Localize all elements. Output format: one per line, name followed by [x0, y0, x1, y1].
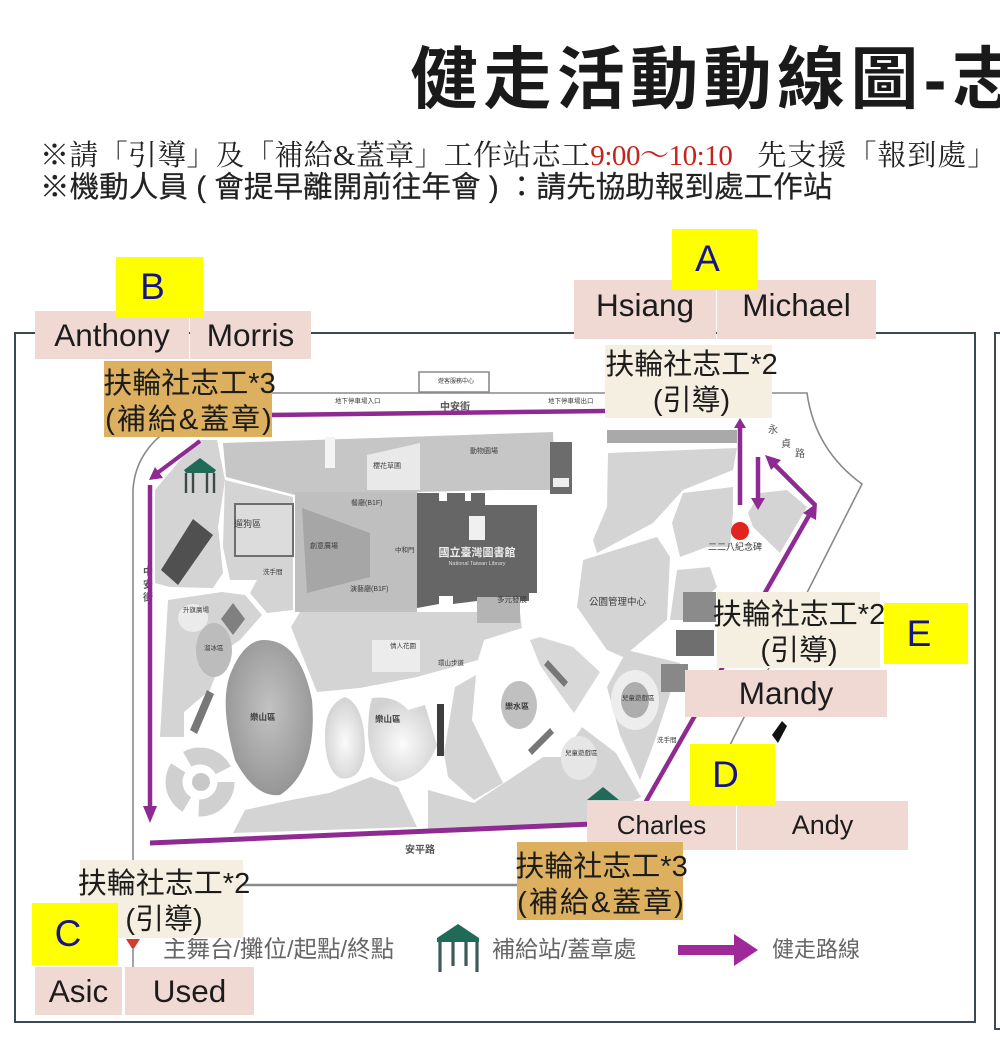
legend text: stage: 主舞台/攤位/起點/終點 — [163, 936, 394, 962]
group D: supply volunteers: (補給&蓋章) — [517, 887, 686, 919]
icon: stage pin — [126, 939, 140, 968]
group D: name Charles: Charles — [617, 810, 706, 840]
map place names — [143, 377, 805, 856]
group B: badge — [116, 257, 203, 317]
map place names: 情人花園 — [390, 641, 416, 650]
group B: name Morris — [190, 311, 311, 359]
map place names: 環山步道 — [438, 658, 464, 667]
group B: supply volunteers: (補給&蓋章) — [105, 404, 274, 436]
group A: name Michael — [717, 280, 876, 339]
group C: name Used: Used — [153, 972, 226, 1008]
legend — [126, 924, 860, 972]
group E: badge — [884, 603, 968, 664]
icon: start and finish point — [731, 522, 749, 540]
group D: supply volunteers — [517, 842, 683, 920]
group D: badge: D — [712, 754, 739, 794]
group C: name Asic: Asic — [49, 972, 108, 1008]
map place names: 中和門 — [395, 545, 414, 554]
map place names: 遛狗區 — [234, 518, 261, 529]
map place names: 洗手間 — [657, 735, 676, 744]
map place names: 兒童遊戲區 — [622, 693, 655, 702]
group B: supply volunteers: 扶輪社志工*3 — [103, 368, 276, 400]
map place names: 路 — [795, 447, 805, 460]
group A: name Hsiang: Hsiang — [596, 287, 694, 323]
group A: guides: 扶輪社志工*2 — [605, 348, 778, 380]
group E: badge: E — [907, 612, 931, 654]
group A: guides: (引導) — [653, 384, 730, 416]
group D: supply volunteers: 扶輪社志工*3 — [515, 851, 688, 883]
mounds and plazas — [161, 519, 659, 795]
group E: name Mandy: Mandy — [739, 675, 833, 711]
group E: guides — [717, 592, 880, 668]
group A: badge — [672, 229, 757, 289]
map place names: 創意廣場 — [310, 541, 338, 550]
map place names: 升旗廣場 — [183, 605, 210, 614]
map place names: 安平路 — [405, 843, 435, 856]
map place names: 貞 — [781, 438, 791, 450]
group D: badge — [690, 744, 775, 805]
map place names: 二二八紀念碑 — [708, 541, 762, 552]
map place names: 遊客服務中心 — [438, 377, 474, 385]
icon: route arrow — [678, 934, 758, 966]
notice line 2: ※機動人員 ( 會提早離開前往年會 ) ：請先協助報到處工作站 — [40, 171, 832, 204]
group A: guides — [605, 345, 772, 418]
map place names: 中 — [143, 565, 153, 578]
group B: badge: B — [140, 266, 165, 307]
group E: guides: 扶輪社志工*2 — [713, 599, 885, 631]
group C: name Asic — [35, 967, 122, 1015]
map place names: 公園管理中心 — [589, 596, 647, 608]
group B: name Anthony: Anthony — [54, 316, 170, 352]
group C: guides: 扶輪社志工*2 — [78, 868, 250, 900]
map place names: 演藝廳(B1F) — [350, 584, 388, 593]
group C: badge: C — [55, 913, 81, 954]
group B: name Anthony — [35, 311, 189, 359]
facility blocks — [190, 592, 787, 755]
map place names: 兒童遊戲區 — [565, 748, 598, 757]
group A: badge: A — [695, 238, 720, 279]
group D: name Charles — [587, 801, 736, 850]
icon: supply tent north-west — [184, 458, 216, 493]
group B: supply volunteers — [104, 361, 272, 437]
group C: guides — [80, 860, 243, 938]
map place names: 地下停車場出口 — [548, 396, 594, 405]
group A: name Michael: Michael — [742, 287, 851, 323]
group D: name Andy — [737, 801, 908, 850]
national library building — [235, 442, 572, 623]
map place names: 洗手間 — [263, 567, 282, 576]
map place names: 櫻花草圃 — [373, 461, 401, 470]
ring plaza — [174, 756, 226, 808]
group A: name Hsiang — [574, 280, 716, 339]
map outline — [133, 372, 862, 885]
national library building: 國立臺灣圖書館 — [438, 545, 516, 559]
map place names: 安 — [143, 578, 153, 591]
park areas — [155, 430, 807, 833]
map place names: 動物園場 — [470, 446, 498, 455]
map place names: 樂水區 — [505, 701, 529, 711]
icon: supply tent south-east — [587, 787, 619, 800]
group D: name Andy: Andy — [792, 810, 853, 840]
notice line 1: ※請「引導」及「補給&蓋章」工作站志工9:00～10:10 先支援「報到處」 — [40, 140, 997, 172]
national library building: National Taiwan Library — [448, 561, 506, 567]
map place names: 中安街 — [440, 400, 470, 413]
map place names: 永 — [768, 423, 778, 436]
group E: guides: (引導) — [760, 635, 838, 667]
map place names: 多元發展 — [497, 594, 527, 604]
map place names: 地下停車場入口 — [335, 396, 380, 405]
icon: supply tent — [437, 924, 479, 972]
map place names: 餐廳(B1F) — [351, 498, 382, 507]
group C: badge — [32, 903, 118, 965]
group C: guides: (引導) — [125, 904, 203, 936]
panel: right neighbour frame — [994, 332, 1000, 1030]
map place names: 溜冰區 — [204, 643, 224, 652]
group C: name Used — [125, 967, 254, 1015]
legend text: supply: 補給站/蓋章處 — [492, 936, 636, 962]
group B: name Morris: Morris — [207, 316, 294, 352]
map place names: 樂山區 — [375, 714, 401, 724]
map place names: 樂山區 — [250, 712, 276, 722]
legend text: route: 健走路線 — [772, 937, 860, 962]
walking route — [143, 411, 817, 843]
panel: map frame — [14, 332, 976, 1023]
map place names: 街 — [143, 591, 153, 604]
group E: name Mandy — [685, 670, 887, 717]
